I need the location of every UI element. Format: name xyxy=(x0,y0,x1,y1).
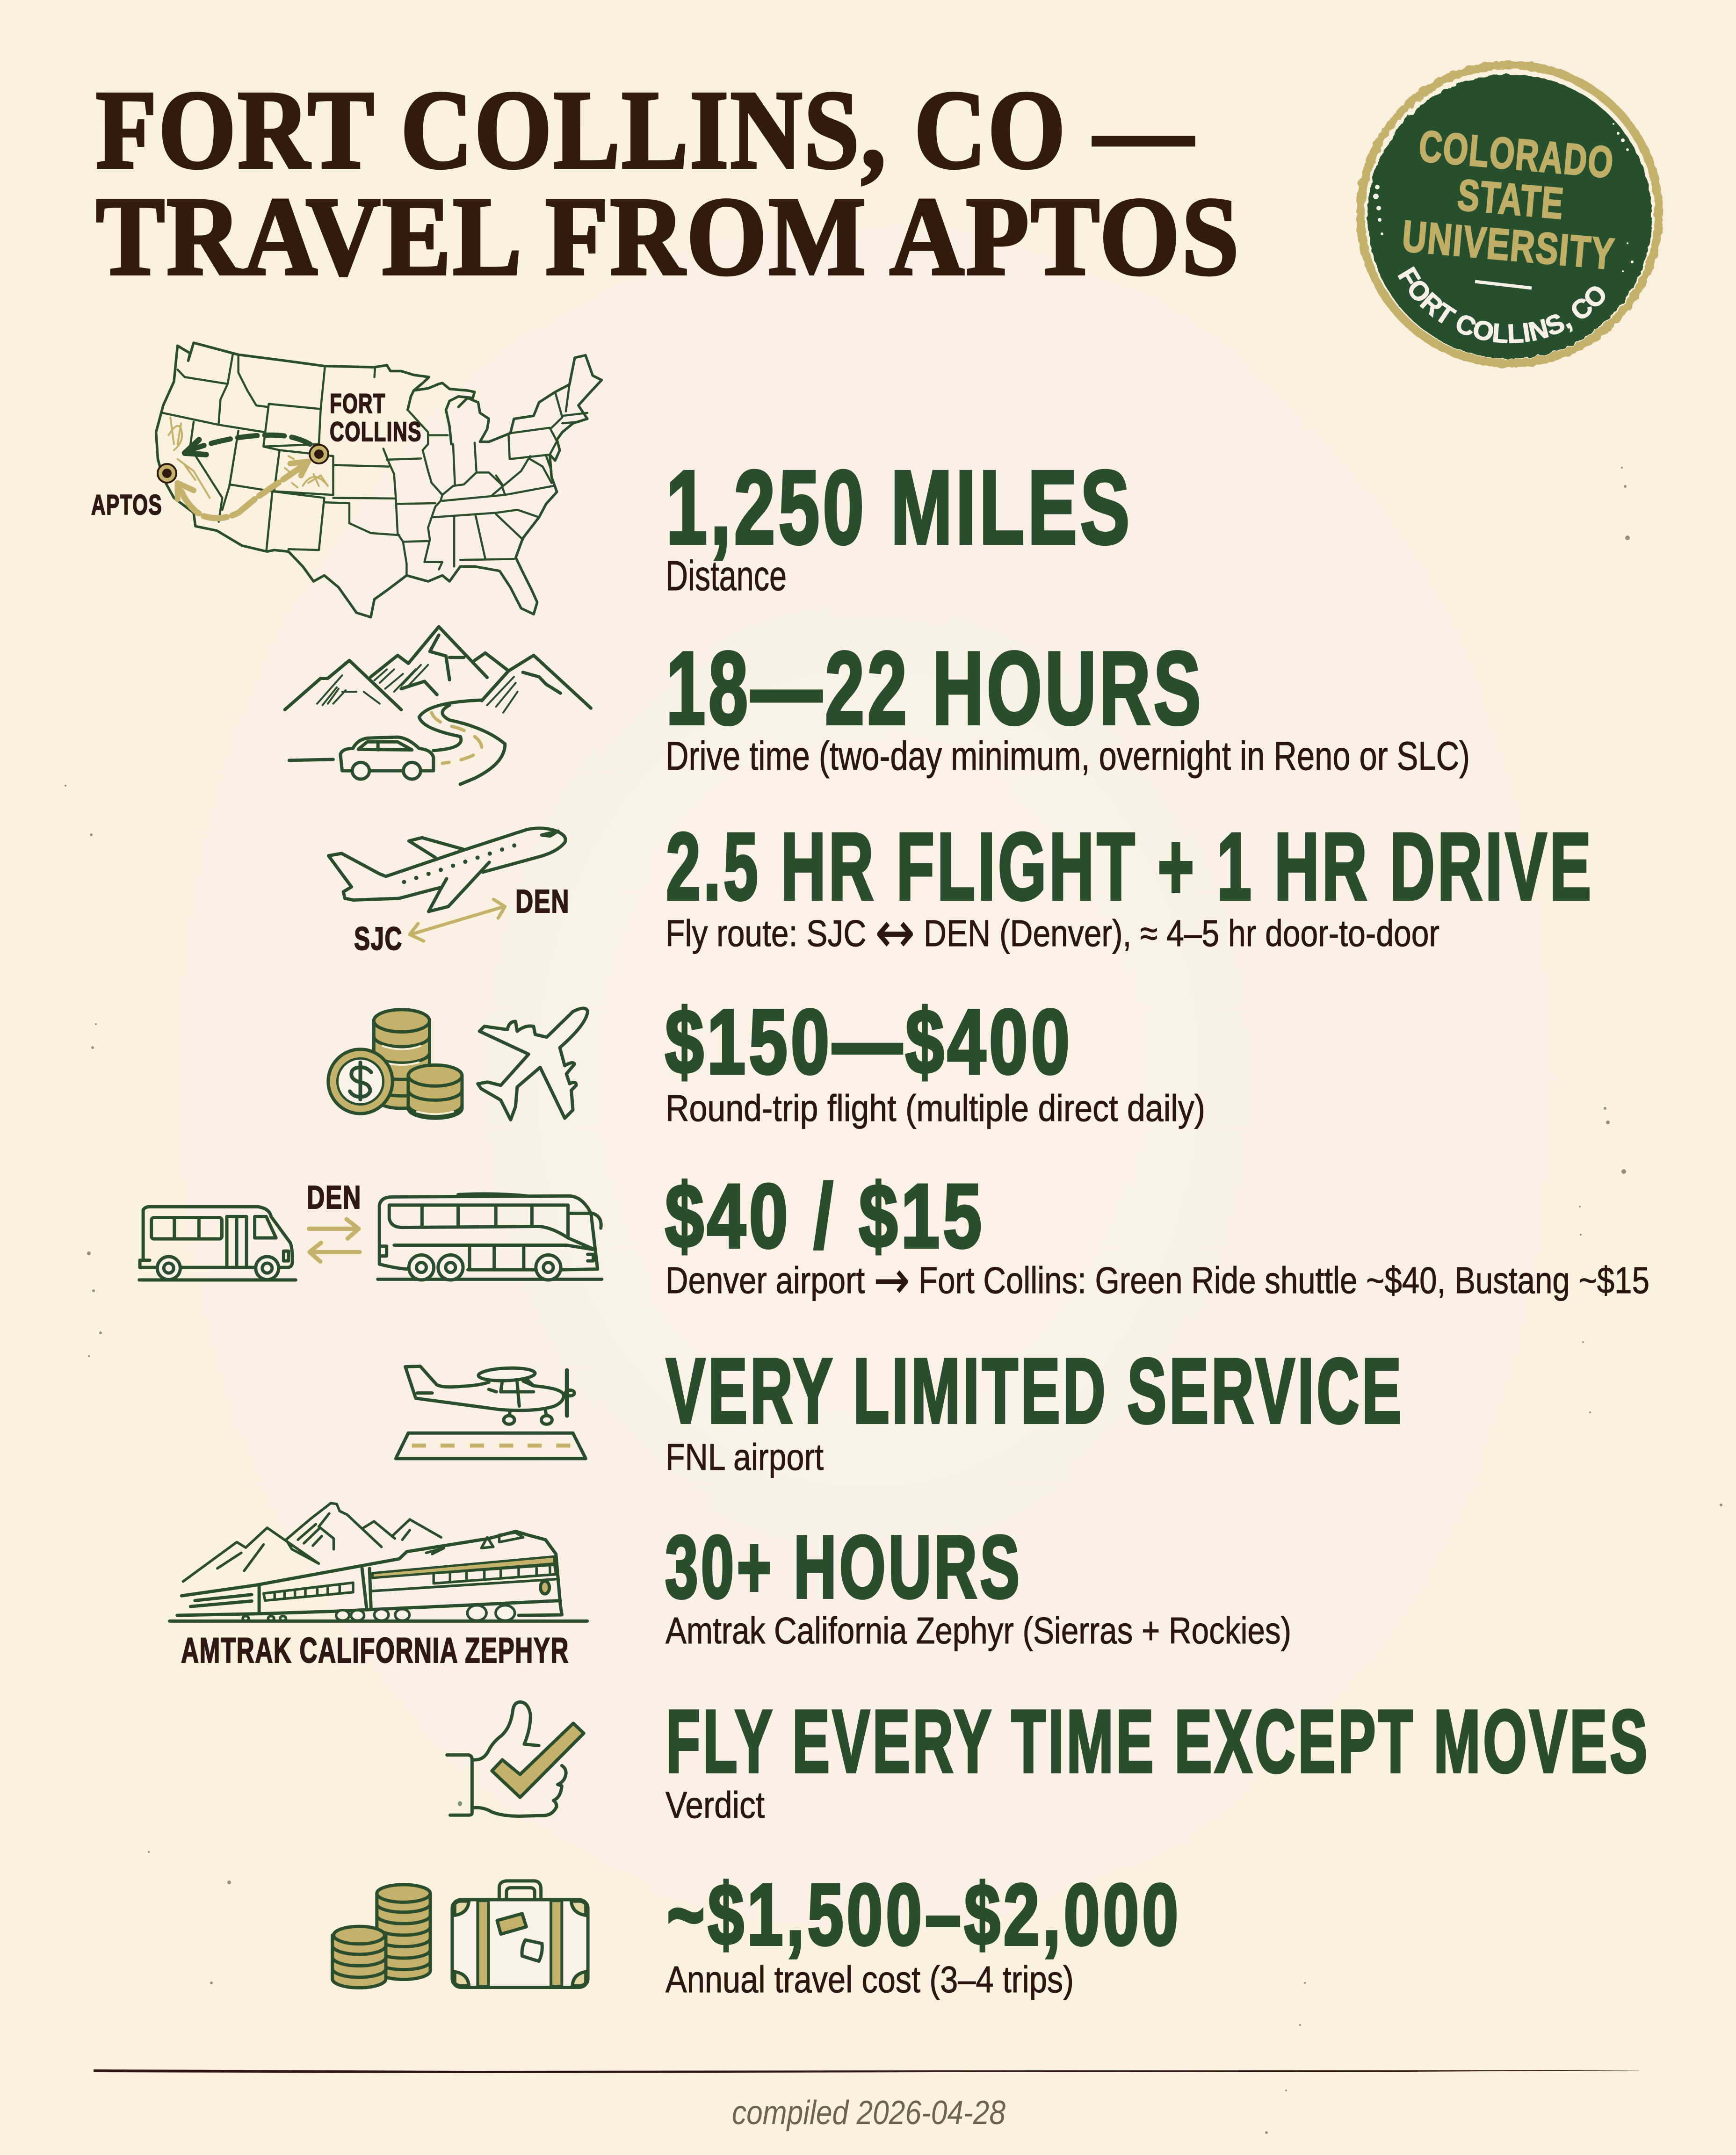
label: Collins: COLLINS xyxy=(330,417,422,447)
caption: round trip: Round-trip flight (multiple direct daily) xyxy=(665,1087,1205,1129)
row: flight price: $150—$400 xyxy=(665,991,1073,1093)
row: annual cost xyxy=(665,1866,1181,2000)
icon: mountains and car xyxy=(285,627,591,784)
row: drive time: 18—22 HOURS xyxy=(666,630,1204,746)
footer: compile date: compiled 2026-04-28 xyxy=(732,2094,1005,2132)
row: distance: 1,250 MILES xyxy=(666,449,1133,566)
caption: FNL: FNL airport xyxy=(665,1436,824,1478)
caption: transfer: → xyxy=(874,1250,910,1310)
title xyxy=(96,67,1241,298)
caption: train: Amtrak California Zephyr (Sierras + Rockies) xyxy=(665,1610,1291,1651)
row: airport transfer: $40 / $15 xyxy=(665,1165,985,1267)
icon: small plane on runway xyxy=(396,1366,586,1459)
marker: Fort Collins xyxy=(310,445,328,463)
row: train xyxy=(665,1518,1291,1651)
caption: distance: Distance xyxy=(665,553,787,600)
row: annual cost: ~$1,500–$2,000 xyxy=(667,1866,1181,1963)
label: Fort Collins: FORT xyxy=(330,389,386,419)
row: FNL airport xyxy=(665,1339,1404,1478)
caption: fly route: DEN (Denver), ≈ 4–5 hr door-to-door xyxy=(915,912,1439,954)
caption: fly route: Fly route: SJC xyxy=(665,912,903,954)
badge: Colorado State University xyxy=(1360,65,1659,363)
icon: Amtrak train and mountains xyxy=(170,1503,587,1670)
label: Aptos: APTOS xyxy=(91,489,162,521)
caption: fly route: ↔ xyxy=(875,900,915,965)
title: TRAVEL FROM APTOS xyxy=(96,174,1241,298)
row: train: 30+ HOURS xyxy=(665,1518,1022,1617)
badge: Colorado State University: UNIVERSITY xyxy=(1400,211,1617,279)
row: distance xyxy=(665,449,1133,600)
label: DEN: DEN xyxy=(307,1179,362,1215)
icon: coins and suitcase xyxy=(333,1881,588,1988)
icon: thumbs up with check xyxy=(447,1702,584,1816)
icon: airplane with SJC DEN arrow xyxy=(328,828,570,957)
badge: Colorado State University: STATE xyxy=(1456,170,1566,228)
row: airport transfer xyxy=(665,1165,1649,1310)
row: flight time xyxy=(665,813,1594,965)
label: Amtrak California Zephyr: AMTRAK CALIFORNIA ZEPHYR xyxy=(181,1631,569,1670)
marker: Aptos xyxy=(158,464,176,483)
badge: Colorado State University: COLORADO xyxy=(1417,121,1616,187)
label: SJC: SJC xyxy=(354,920,403,957)
label: DEN: DEN xyxy=(515,883,570,919)
icon: shuttle and bus xyxy=(139,1179,602,1280)
caption: drive time: Drive time (two-day minimum, overnight in Reno or SLC) xyxy=(665,734,1470,779)
row: verdict xyxy=(665,1692,1650,1826)
caption: annual cost: Annual travel cost (3–4 trips) xyxy=(665,1959,1074,2000)
badge: Colorado State University: FORT COLLINS, CO xyxy=(1392,262,1613,349)
caption: transfer: Denver airport xyxy=(665,1259,903,1301)
icon: US route map xyxy=(91,343,601,617)
caption: verdict: Verdict xyxy=(665,1784,765,1826)
title: FORT COLLINS, CO — xyxy=(96,67,1195,192)
icon: coins and airplane xyxy=(328,1008,588,1120)
